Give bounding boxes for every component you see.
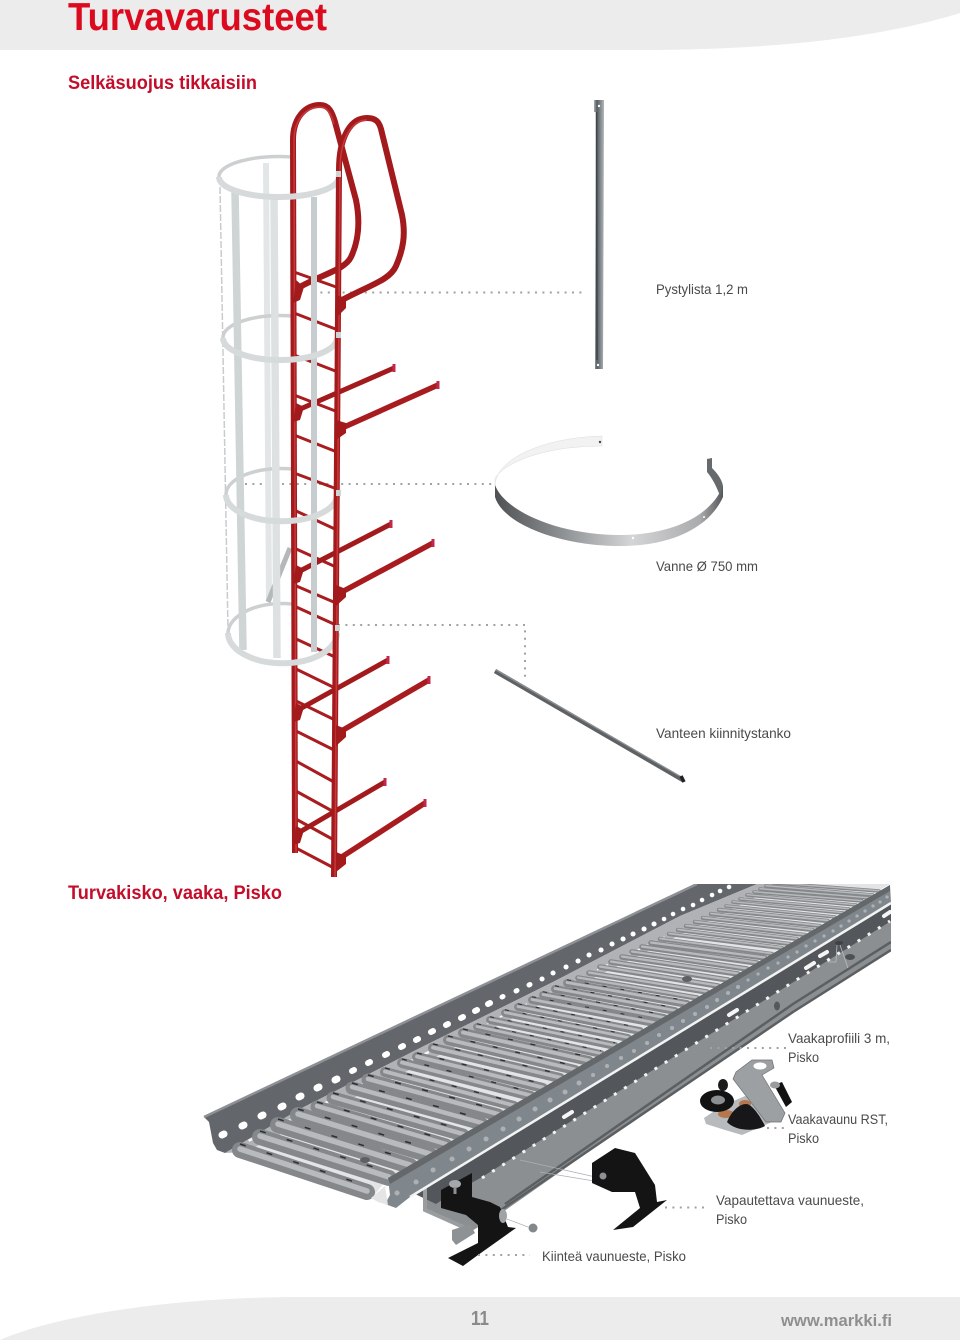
white flange edge (410, 903, 891, 1197)
heading: safety rail: Turvakisko, vaaka, Pisko (68, 882, 282, 904)
grey tab (452, 1224, 475, 1245)
wall brackets behind (293, 280, 304, 845)
footer band (0, 1297, 960, 1340)
bolt (449, 1180, 461, 1188)
illustration: ladder with back guard (219, 105, 438, 877)
label: fixed stop: Kiinteä vaunueste, Pisko (542, 1248, 686, 1264)
leader line: release stop (665, 1206, 706, 1208)
heading: back guard for ladders: Selkäsuojus tikkaisiin (68, 73, 257, 94)
illustration: horizontal carriage (700, 1060, 792, 1135)
flange holes (397, 897, 887, 1193)
leader line: vertical strip (313, 292, 586, 294)
fixing line (507, 1219, 528, 1227)
flange slots (564, 912, 890, 1117)
perforated floor edge (225, 884, 782, 1153)
floor backing (235, 884, 890, 1198)
label: carriage: Pisko (788, 1130, 819, 1146)
copper spacers (718, 1110, 734, 1118)
right rail and outer handle (334, 118, 404, 877)
flange teeth (482, 921, 890, 1178)
leader line: horizontal profile (710, 1047, 786, 1049)
dark flange band (415, 903, 891, 1204)
cage hoops front (219, 177, 339, 663)
label: carriage (788, 1111, 888, 1146)
label: horizontal profile (788, 1030, 890, 1065)
carriage base plate (704, 1096, 776, 1135)
header band (0, 0, 960, 50)
metal strap (733, 1060, 785, 1122)
wall holes (222, 887, 729, 1135)
lower rail channel (498, 942, 891, 1212)
illustration: vertical strip (594, 100, 604, 369)
cage back parts (219, 157, 292, 633)
leader line: carriage (767, 1127, 787, 1129)
leader line: hoop (245, 483, 495, 485)
front wall brackets (337, 385, 438, 860)
black body (441, 1173, 516, 1266)
left rail and inner handle (293, 105, 358, 853)
label: vertical strip: Pystylista 1,2 m (656, 281, 748, 297)
illustration: horizontal safety rail (204, 883, 891, 1232)
ladder rungs (294, 272, 339, 868)
nut (528, 1224, 538, 1232)
small rear fitting (718, 1079, 728, 1091)
front roller (727, 1104, 765, 1130)
leader line: hoop fixing rod (338, 625, 525, 682)
flange end cap (371, 1186, 388, 1205)
illustration: release stop (520, 1148, 667, 1230)
front flange (385, 885, 891, 1208)
rail underside panel (425, 903, 891, 1232)
illustration: fixed stop (441, 1173, 538, 1266)
cage clips (335, 171, 341, 631)
label: carriage: Vaakavaunu RST, (788, 1111, 888, 1127)
floor slats (240, 883, 879, 1192)
label: hoop fixing rod: Vanteen kiinnitystanko (656, 725, 791, 741)
label: hoop: Vanne Ø 750 mm (656, 558, 758, 574)
left roller (700, 1090, 734, 1112)
bracket end caps (385, 364, 438, 807)
washer (499, 1209, 507, 1223)
page number: 11 (471, 1308, 489, 1330)
loose bolts on rail (360, 941, 855, 1163)
illustration: hoop fixing rod (495, 670, 684, 782)
label: horizontal profile: Vaakaprofiili 3 m, (788, 1030, 890, 1046)
cage bars front (235, 190, 314, 658)
label: release stop (716, 1192, 864, 1227)
rear nut (774, 1082, 792, 1107)
back wall (204, 884, 757, 1153)
label: release stop: Pisko (716, 1211, 747, 1227)
website: www.markki.fi (780, 1311, 892, 1330)
leader line: fixed stop (478, 1254, 530, 1256)
label: horizontal profile: Pisko (788, 1049, 819, 1065)
illustration: hoop (495, 436, 723, 546)
label: release stop: Vapautettava vaunueste, (716, 1192, 864, 1208)
lower end profile (423, 1188, 464, 1228)
